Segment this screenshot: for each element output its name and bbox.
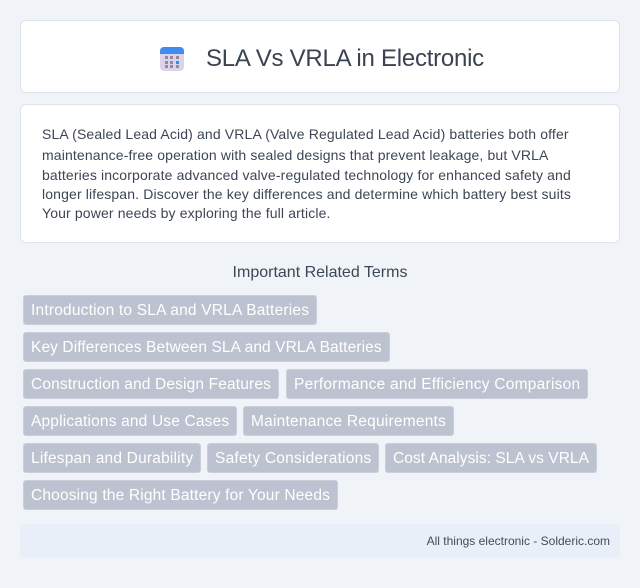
footer credit: All things electronic - Solderic.com bbox=[427, 534, 610, 548]
related terms tags: Performance and Efficiency Comparison bbox=[294, 376, 580, 393]
title: SLA Vs VRLA in Electronic bbox=[206, 45, 484, 72]
summary text: maintenance-free operation with sealed designs that prevent leakage, but VRLA bbox=[42, 147, 549, 163]
summary text bbox=[42, 126, 571, 221]
related terms tags: Key Differences Between SLA and VRLA Batteries bbox=[31, 339, 382, 356]
summary text: SLA (Sealed Lead Acid) and VRLA (Valve Regulated Lead Acid) batteries both offer bbox=[42, 126, 569, 142]
related terms tags: Applications and Use Cases bbox=[31, 413, 229, 430]
related terms tags: Maintenance Requirements bbox=[251, 413, 446, 430]
related terms tags: Safety Considerations bbox=[215, 450, 371, 467]
related terms tags bbox=[23, 295, 597, 510]
related terms tags: Construction and Design Features bbox=[31, 376, 271, 393]
icon: calendar bbox=[160, 47, 184, 71]
summary text: batteries incorporate advanced valve-regulated technology for enhanced safety and bbox=[42, 167, 571, 183]
header card bbox=[20, 20, 620, 93]
summary card bbox=[20, 104, 620, 243]
related terms tags: Cost Analysis: SLA vs VRLA bbox=[393, 450, 589, 467]
related terms tags: Choosing the Right Battery for Your Needs bbox=[31, 487, 330, 504]
related terms heading: Important Related Terms bbox=[233, 264, 407, 281]
related terms tags: Lifespan and Durability bbox=[31, 450, 193, 467]
summary text: longer lifespan. Discover the key differences and determine which battery best suits bbox=[42, 186, 571, 202]
summary text: Your power needs by exploring the full article. bbox=[42, 205, 331, 221]
related terms tags: Introduction to SLA and VRLA Batteries bbox=[31, 302, 309, 319]
footer bbox=[20, 524, 620, 558]
